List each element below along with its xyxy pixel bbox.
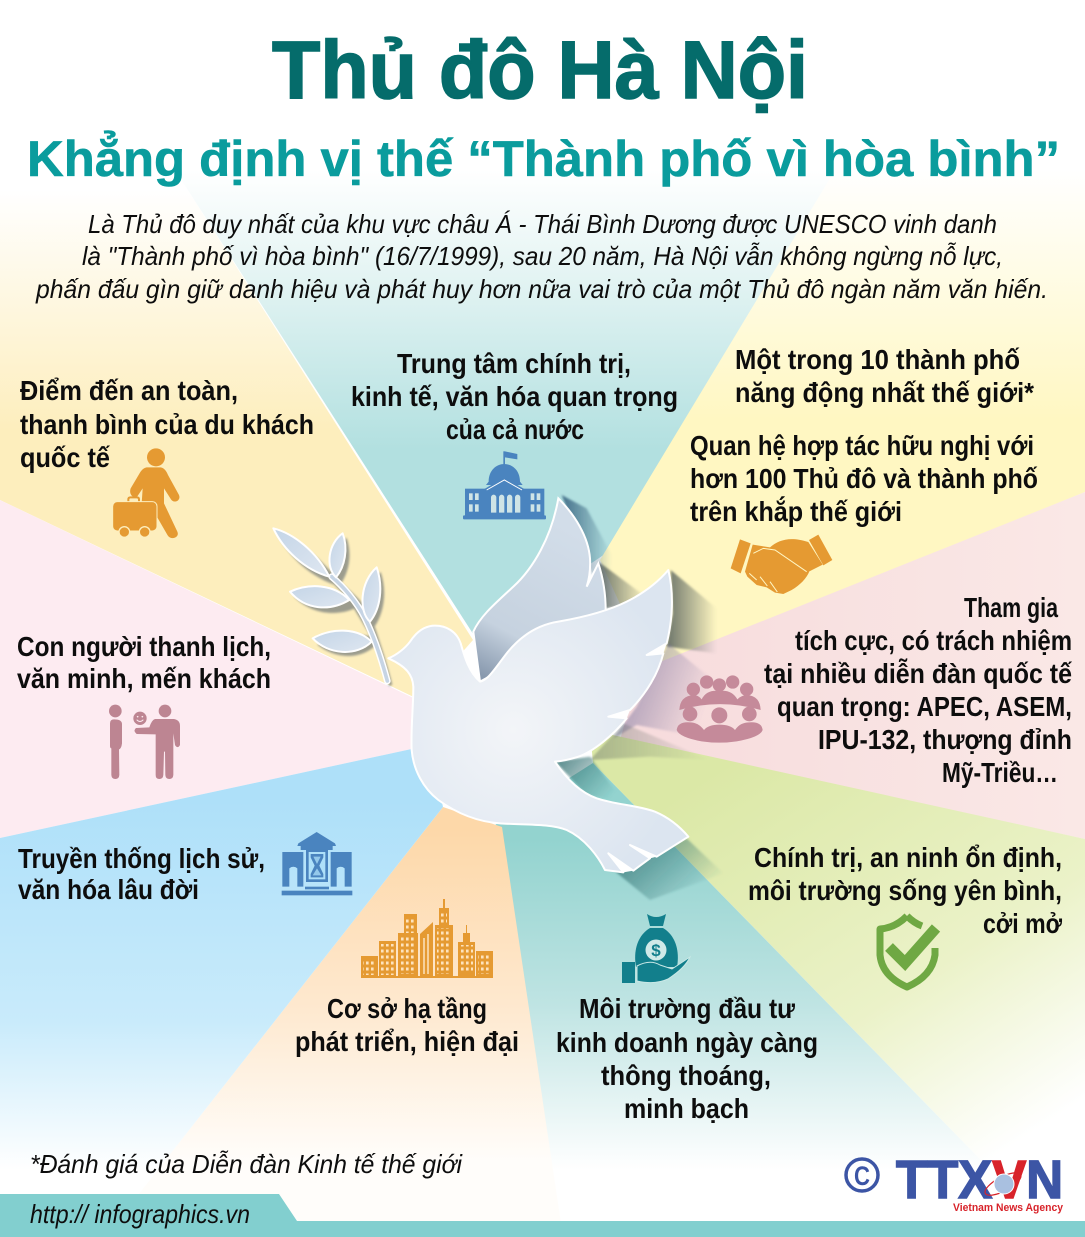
- text: investment environment: minh bạch: [624, 1093, 749, 1124]
- subtitle: Khẳng định vị thế “Thành phố vì hòa bình”: [27, 130, 1060, 187]
- text: friendly cooperation: hơn 100 Thủ đô và thành phố: [690, 463, 1038, 494]
- icon: traveller with suitcase: [113, 448, 179, 538]
- text: international forums: [764, 592, 1072, 788]
- text: investment environment: [556, 993, 818, 1124]
- panel: infrastructure: [295, 899, 519, 1057]
- copyright mark: C: [854, 1161, 870, 1191]
- intro paragraph: phấn đấu gìn giữ danh hiệu và phát huy hơn nữa vai trò của một Thủ đô ngàn năm văn hiến.: [35, 274, 1048, 304]
- icon: greeting people: [109, 705, 180, 779]
- logo: TTXVN: TTXVN: [896, 1150, 1063, 1210]
- panel: history and culture: [18, 832, 352, 905]
- intro paragraph: Là Thủ đô duy nhất của khu vực châu Á - Thái Bình Dương được UNESCO vinh danh: [88, 209, 997, 239]
- text: investment environment: thông thoáng,: [601, 1060, 771, 1091]
- intro paragraph: là "Thành phố vì hòa bình" (16/7/1999), sau 20 năm, Hà Nội vẫn không ngừng nỗ lực,: [82, 241, 1003, 271]
- icon: money bag in hand: $: [651, 941, 661, 960]
- dove with olive branch: [273, 495, 723, 900]
- text: investment environment: kinh doanh ngày càng: [556, 1027, 818, 1058]
- intro paragraph: [35, 209, 1048, 304]
- footer bar: [0, 1194, 1085, 1237]
- text: safe destination: thanh bình của du khách: [20, 409, 314, 440]
- text: friendly cooperation: Quan hệ hợp tác hữu nghị với: [690, 430, 1034, 461]
- text: polite people: văn minh, mến khách: [17, 663, 271, 694]
- text: international forums: Tham gia: [964, 592, 1058, 623]
- logo: TTXVN: Vietnam News Agency: [953, 1202, 1064, 1214]
- text: safe destination: quốc tế: [20, 442, 110, 473]
- icon: shield with check: [880, 916, 936, 987]
- text: international forums: Mỹ-Triều…: [942, 757, 1058, 788]
- panel: polite people: [17, 631, 271, 779]
- olive branch: [273, 528, 392, 686]
- panel: dynamic city: Một trong 10 thành phố: [735, 344, 1020, 375]
- panel: history and culture: văn hóa lâu đời: [18, 874, 199, 905]
- panel: political centre: [351, 348, 678, 519]
- panel: stable politics: [748, 842, 1062, 987]
- text: infrastructure: phát triển, hiện đại: [295, 1026, 519, 1057]
- text: infrastructure: Cơ sở hạ tầng: [327, 993, 487, 1024]
- panel: safe destination: [20, 375, 314, 538]
- feather slivers: [608, 643, 667, 872]
- text: stable politics: cởi mở: [983, 908, 1062, 939]
- panel: history and culture: Truyền thống lịch sử,: [18, 843, 265, 874]
- icon: money bag in hand: [622, 914, 690, 983]
- copyright mark: [846, 1159, 878, 1191]
- panel: dynamic city: năng động nhất thế giới*: [735, 377, 1034, 408]
- icon: government building: [463, 451, 546, 519]
- text: polite people: Con người thanh lịch,: [17, 631, 271, 662]
- panel: dynamic city: [735, 344, 1034, 408]
- panel: friendly cooperation: [690, 430, 1038, 594]
- text: friendly cooperation: [690, 430, 1038, 527]
- text: safe destination: Điểm đến an toàn,: [20, 375, 238, 406]
- icon: hourglass building: [282, 832, 352, 895]
- text: safe destination: [20, 375, 314, 473]
- back wing: [473, 498, 606, 682]
- text: political centre: của cả nước: [446, 414, 584, 445]
- text: infrastructure: [295, 993, 519, 1057]
- text: political centre: kinh tế, văn hóa quan trọng: [351, 381, 678, 412]
- icon: round table meeting: [677, 675, 763, 743]
- text: political centre: [351, 348, 678, 445]
- text: political centre: Trung tâm chính trị,: [397, 348, 631, 379]
- panel: international forums: [677, 592, 1072, 788]
- footnote: *Đánh giá của Diễn đàn Kinh tế thế giới: [30, 1149, 463, 1179]
- panel: investment environment: [556, 914, 818, 1124]
- icon: handshake: [731, 535, 832, 594]
- text: investment environment: Môi trường đầu tư: [579, 993, 796, 1024]
- title: Thủ đô Hà Nội: [272, 25, 808, 116]
- text: friendly cooperation: trên khắp thế giới: [690, 496, 902, 527]
- text: polite people: [17, 631, 271, 694]
- website url: http:// infographics.vn: [30, 1199, 250, 1229]
- dove body and main wing: [388, 570, 688, 872]
- text: stable politics: [748, 842, 1062, 939]
- icon: city skyline: [361, 899, 493, 978]
- dove long shadows: [555, 495, 723, 900]
